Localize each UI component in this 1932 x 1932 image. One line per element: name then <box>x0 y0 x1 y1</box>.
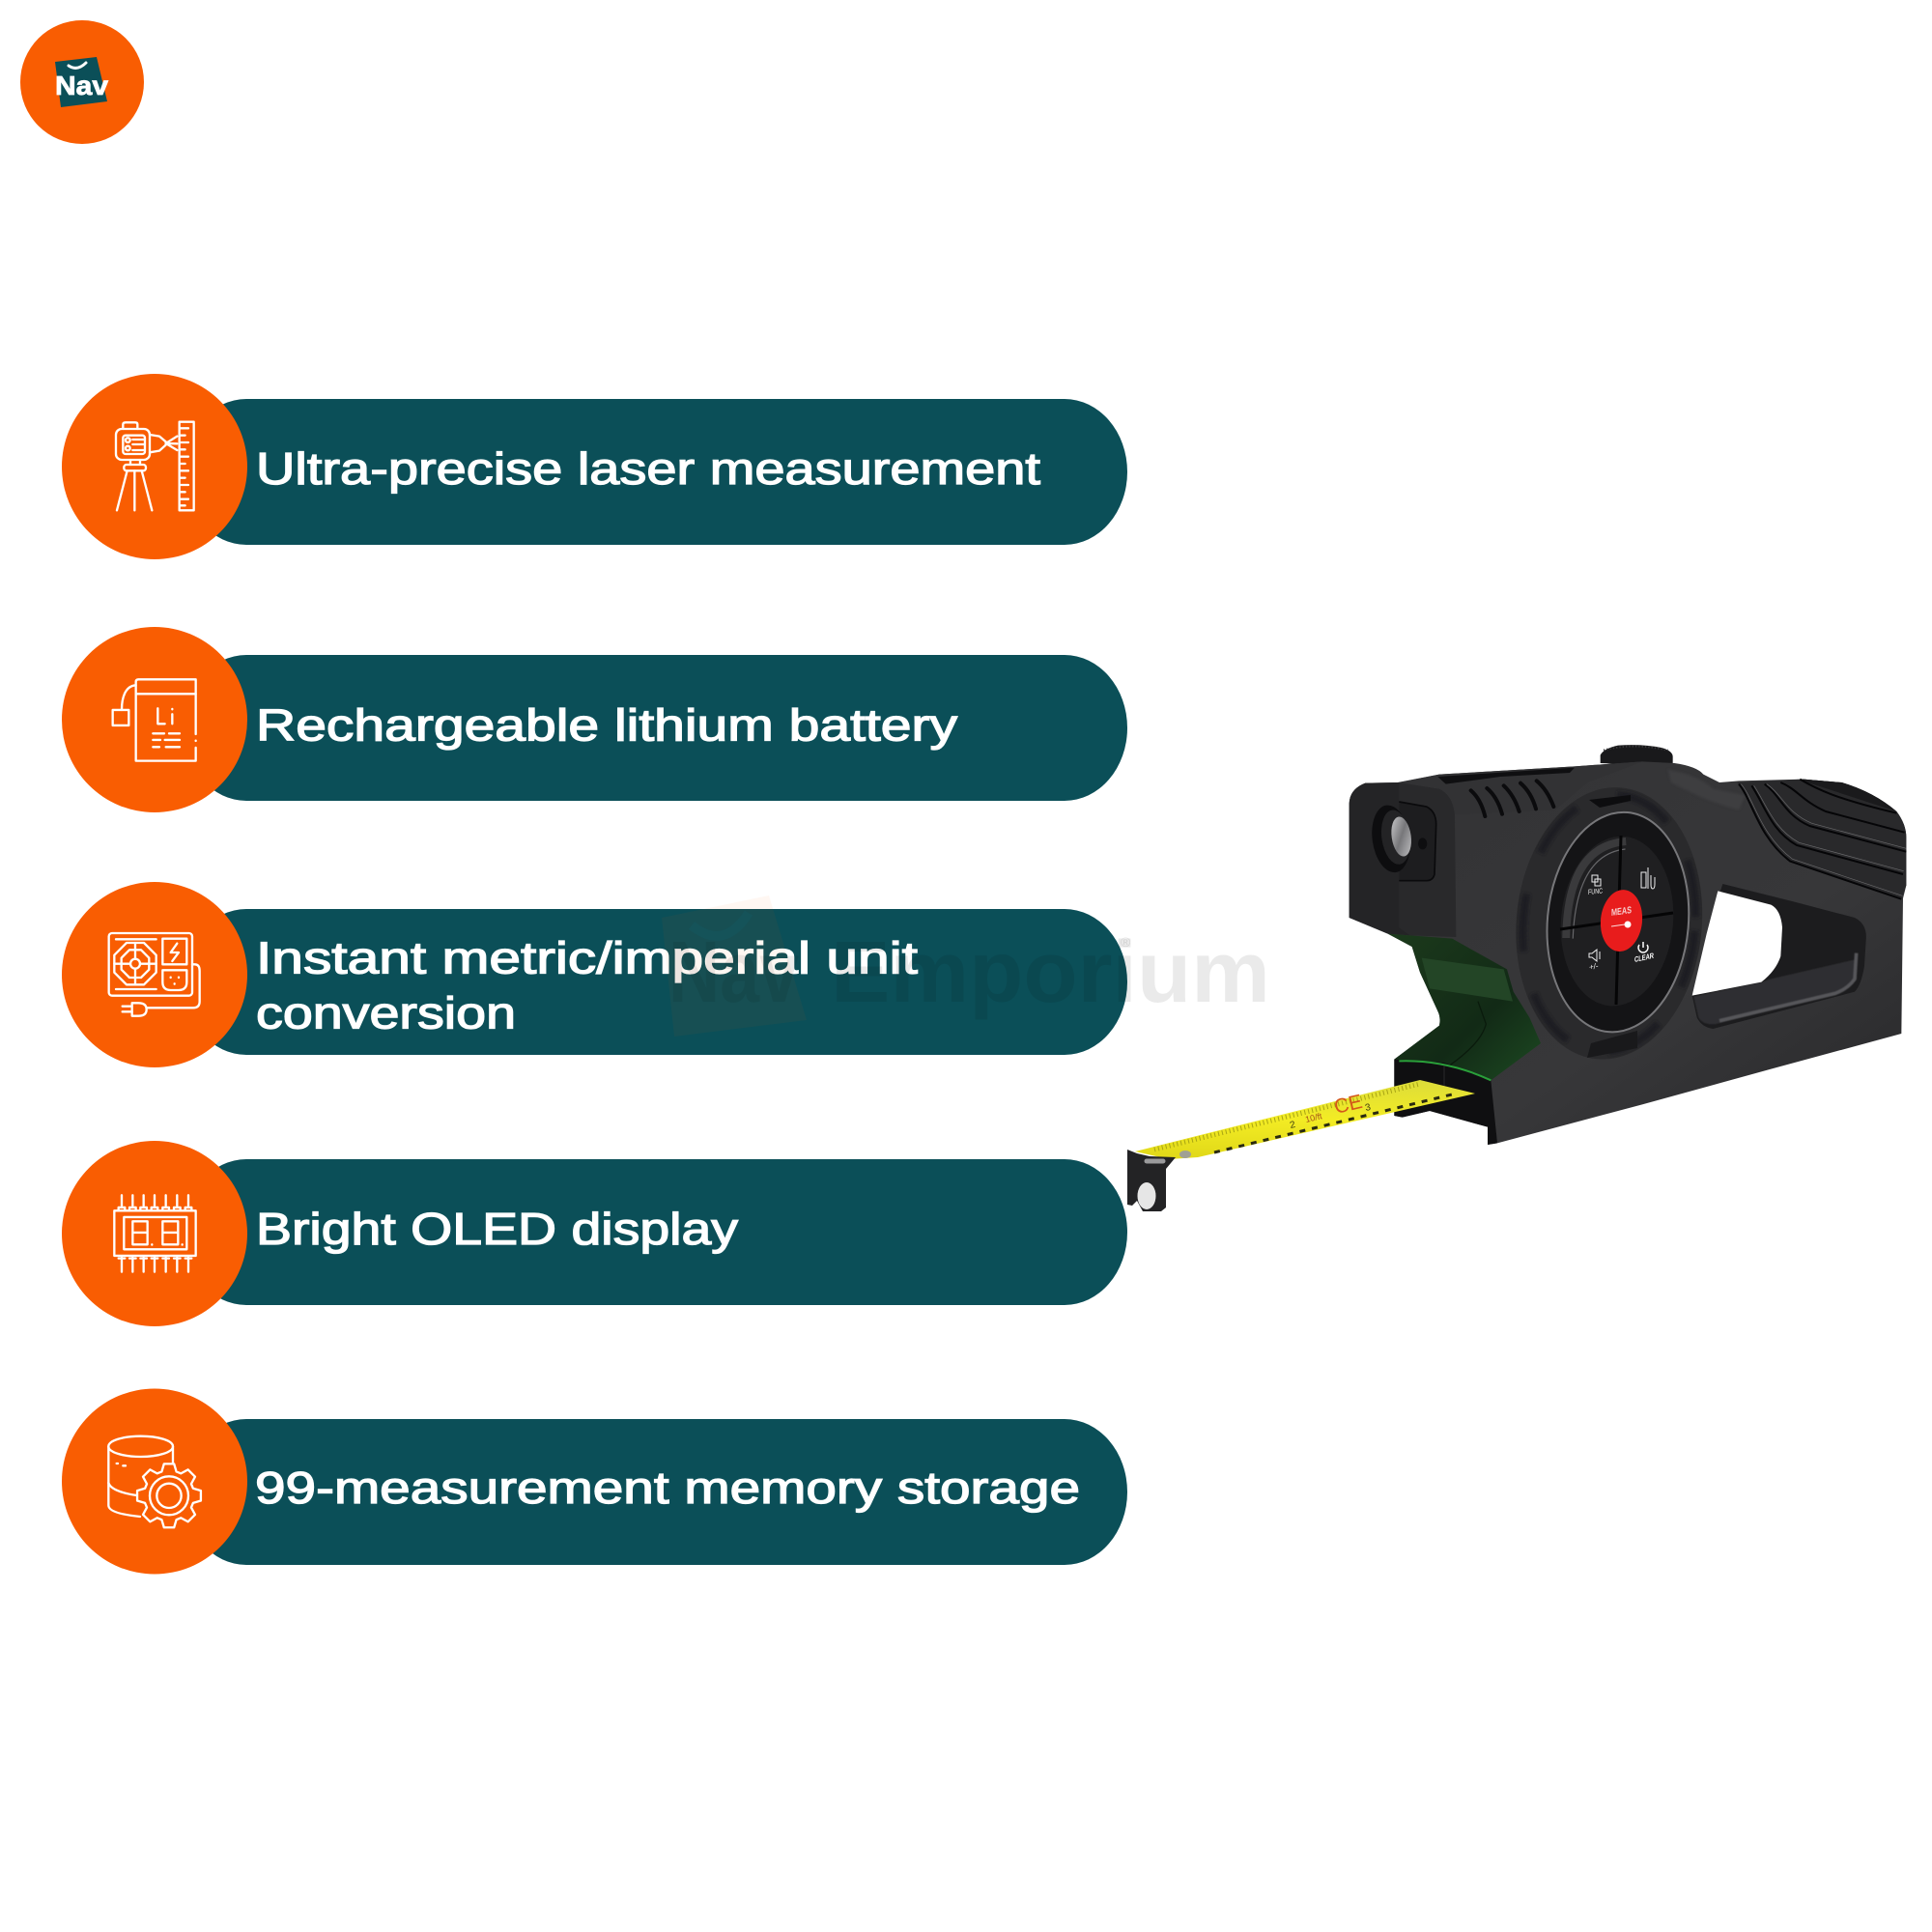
recess highlight <box>1719 953 1857 1021</box>
pill 2 <box>184 655 1127 801</box>
top knob <box>1601 745 1673 766</box>
lens <box>1368 803 1427 875</box>
speaker icon <box>1589 950 1600 961</box>
icon: database with gear <box>108 1436 201 1527</box>
icon: power supply unit <box>109 933 200 1016</box>
label 4: Bright OLED display <box>256 1204 738 1254</box>
green level section <box>1388 934 1541 1080</box>
logo: Nav badge: Nav <box>55 71 108 100</box>
laser burst <box>1611 924 1625 926</box>
feature row 3: unit conversion: conversion <box>256 987 516 1037</box>
product: laser tape measure <box>1127 745 1906 1211</box>
pill 5 <box>184 1419 1127 1565</box>
meas button <box>1598 888 1645 953</box>
watermark: Nav Emporium: ® <box>1121 934 1131 950</box>
tape hook <box>1127 1150 1191 1211</box>
pill 1 <box>184 399 1127 545</box>
green highlight <box>1399 1061 1491 1080</box>
control dial: FUNC <box>1588 886 1603 896</box>
notch top <box>1589 795 1631 808</box>
tape blade <box>1135 1080 1475 1159</box>
ergonomic grip <box>1737 780 1906 899</box>
control dial: +/- <box>1589 961 1599 972</box>
tape mouth <box>1394 1060 1497 1145</box>
recess lower strip <box>1693 959 1857 1024</box>
vents <box>1471 781 1553 816</box>
badge 4 <box>62 1141 247 1326</box>
top display <box>1437 768 1575 784</box>
icon: lithium battery pack <box>113 679 196 761</box>
logo: Nav badge <box>20 20 144 144</box>
head front panel <box>1350 782 1410 935</box>
mouth seam <box>1442 1065 1445 1089</box>
badge 1 <box>62 374 247 559</box>
notch bottom <box>1587 1031 1637 1058</box>
tape blade: 2 <box>1289 1120 1297 1131</box>
tape blade: CE <box>1332 1091 1365 1119</box>
feature row 5: memory storage <box>62 1389 1127 1575</box>
pill 3 <box>184 909 1127 1055</box>
key dividers <box>1560 836 1673 1005</box>
func icon <box>1592 875 1601 886</box>
head side panel <box>1399 782 1456 937</box>
watermark: Nav Emporium: Emporium <box>831 924 1270 1021</box>
control dial <box>1505 780 1714 1067</box>
feature row 2: lithium battery <box>62 627 1127 812</box>
feature row 3: unit conversion <box>62 882 1127 1067</box>
icon: laser level on tripod with ruler <box>116 422 194 510</box>
tape blade: 10/ft <box>1304 1111 1323 1124</box>
green seam <box>1449 1002 1486 1065</box>
main body <box>1350 761 1906 1145</box>
watermark: Nav Emporium <box>662 895 1270 1037</box>
label 3: Instant metric/imperial unit <box>256 933 918 983</box>
pill 4 <box>184 1159 1127 1305</box>
control dial: CLEAR <box>1634 952 1654 964</box>
badge 3 <box>62 882 247 1067</box>
watermark: Nav Emporium: Nav <box>668 924 799 1021</box>
feature row 1: laser measurement <box>62 374 1127 559</box>
handle recess <box>1692 884 1866 1029</box>
badge 2 <box>62 627 247 812</box>
device housing <box>1350 745 1906 1145</box>
handle opening <box>1692 891 1782 996</box>
control dial: MEAS <box>1611 905 1632 919</box>
label 1: Ultra-precise laser measurement <box>256 443 1040 494</box>
label 2: Rechargeable lithium battery <box>256 699 957 750</box>
body highlight <box>1668 770 1746 810</box>
lens housing <box>1399 802 1436 881</box>
tape blade: 3 <box>1364 1102 1373 1114</box>
power icon <box>1638 942 1648 952</box>
bars icon <box>1641 867 1655 889</box>
icon: seven-segment display chip <box>114 1195 196 1272</box>
head top face <box>1399 761 1642 814</box>
feature row 4: OLED display <box>62 1141 1127 1326</box>
label 5: 99-measurement memory storage <box>255 1463 1080 1513</box>
badge 5 <box>62 1389 247 1575</box>
green window <box>1422 958 1513 1002</box>
